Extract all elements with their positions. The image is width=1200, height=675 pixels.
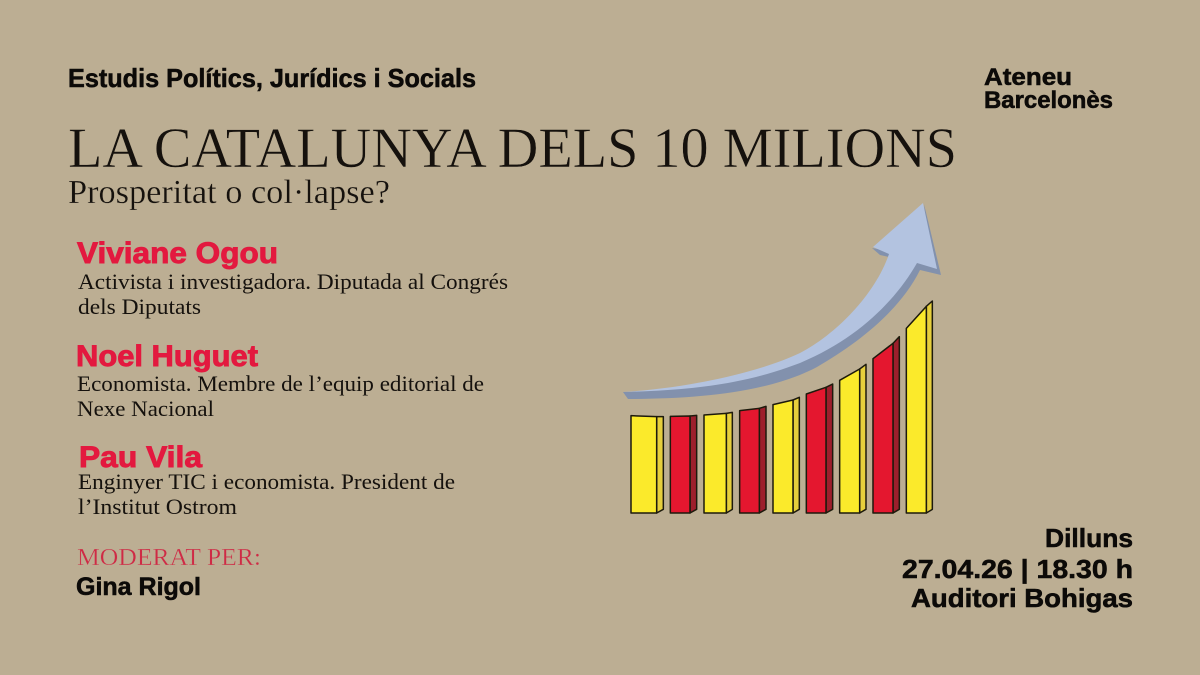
speaker: Viviane Ogou [77,237,508,319]
speaker: Viviane Ogou: Viviane Ogou [77,237,278,270]
speaker: Pau Vila [78,441,455,519]
event details: Auditori Bohigas [911,583,1133,613]
arrow: face [623,203,937,392]
speaker: Noel Huguet: Nexe Nacional [77,396,214,421]
event details [902,523,1133,613]
chart: rising bars with arrow [623,203,941,513]
title: LA CATALUNYA DELS 10 MILIONS [68,117,957,180]
arrow: shadow [623,204,941,399]
event details: Dilluns [1045,523,1133,553]
bars [631,301,932,513]
logo: Ateneu Barcelonès [984,64,1113,114]
speaker: Viviane Ogou: dels Diputats [78,294,201,319]
bar 9 [906,301,932,513]
speaker: Pau Vila: Enginyer TIC i economista. President de [78,469,455,494]
subtitle: Prosperitat o col·lapse? [68,174,390,211]
bar 4 [740,406,766,513]
bar 1 [631,416,663,513]
logo: Ateneu Barcelonès: Ateneu [984,64,1072,91]
bar 7 [840,364,866,513]
bar 8 [873,337,899,513]
bar 2 [670,415,697,513]
heading: department: Estudis Polítics, Jurídics i Socials [68,63,476,93]
speaker: Noel Huguet [76,340,484,421]
speaker: Pau Vila: l’Institut Ostrom [78,494,237,519]
speaker: Noel Huguet: Noel Huguet [76,340,258,373]
bar 5 [773,397,799,513]
arrow: left barb shadow [872,248,889,257]
logo: Ateneu Barcelonès: Barcelonès [984,87,1113,114]
event details: 27.04.26 | 18.30 h [902,554,1133,584]
moderator label: MODERAT PER: [77,545,261,571]
speaker: Pau Vila: Pau Vila [79,441,202,474]
speaker: Noel Huguet: Economista. Membre de l’equip editorial de [77,371,484,396]
speaker: Viviane Ogou: Activista i investigadora. Diputada al Congrés [78,269,508,294]
moderator name: Gina Rigol [76,573,201,601]
bar 3 [704,412,732,513]
bar 6 [806,384,833,513]
